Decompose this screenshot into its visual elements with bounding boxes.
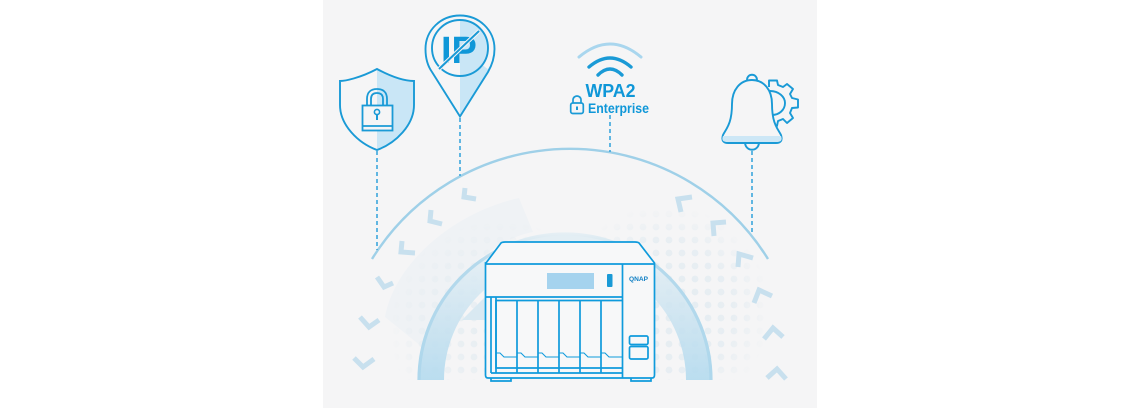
- front buttons: [630, 336, 648, 344]
- tray handles: [496, 353, 622, 357]
- halftone dots right: [627, 228, 747, 374]
- dome arc: [372, 149, 768, 259]
- gear: [769, 80, 798, 127]
- QNAP logo: QNAP: [629, 276, 649, 283]
- LCD screen: [547, 273, 594, 289]
- bell base tint: [722, 136, 782, 142]
- gear hub: [770, 91, 785, 115]
- infographic: NAS security illustration: [323, 0, 817, 408]
- chevrons: [354, 188, 786, 379]
- device feet: [491, 378, 651, 381]
- NAS device: [486, 242, 654, 381]
- icon: crossed-out IP location pin: [426, 16, 494, 116]
- text: Enterprise: Enterprise: [588, 101, 649, 116]
- background graphics: dots and swirl: [406, 228, 747, 380]
- icon: small padlock: [571, 96, 583, 114]
- icon: wifi signal: [579, 44, 641, 75]
- icon: shield with padlock: [340, 69, 414, 150]
- roof edge: [486, 264, 654, 378]
- device body: [486, 242, 654, 378]
- drive bay frame: [491, 297, 622, 373]
- pale outer swirl: [385, 198, 533, 347]
- dashed connectors: [377, 115, 752, 250]
- panel: background: [323, 0, 817, 408]
- bell body: [722, 80, 782, 143]
- halftone dots centre: [445, 254, 487, 373]
- clapper: [745, 143, 759, 150]
- status light: [607, 274, 612, 287]
- bell top knob: [747, 75, 757, 80]
- inner arc: [419, 234, 711, 380]
- inner arrow band: [419, 234, 711, 380]
- icon: bell with gear: [722, 75, 798, 150]
- icon: crossed-out IP location pin: IP: [441, 30, 477, 72]
- heading: WPA2: WPA2: [586, 81, 636, 101]
- left arrowhead: [462, 298, 484, 320]
- drive trays: [496, 300, 622, 373]
